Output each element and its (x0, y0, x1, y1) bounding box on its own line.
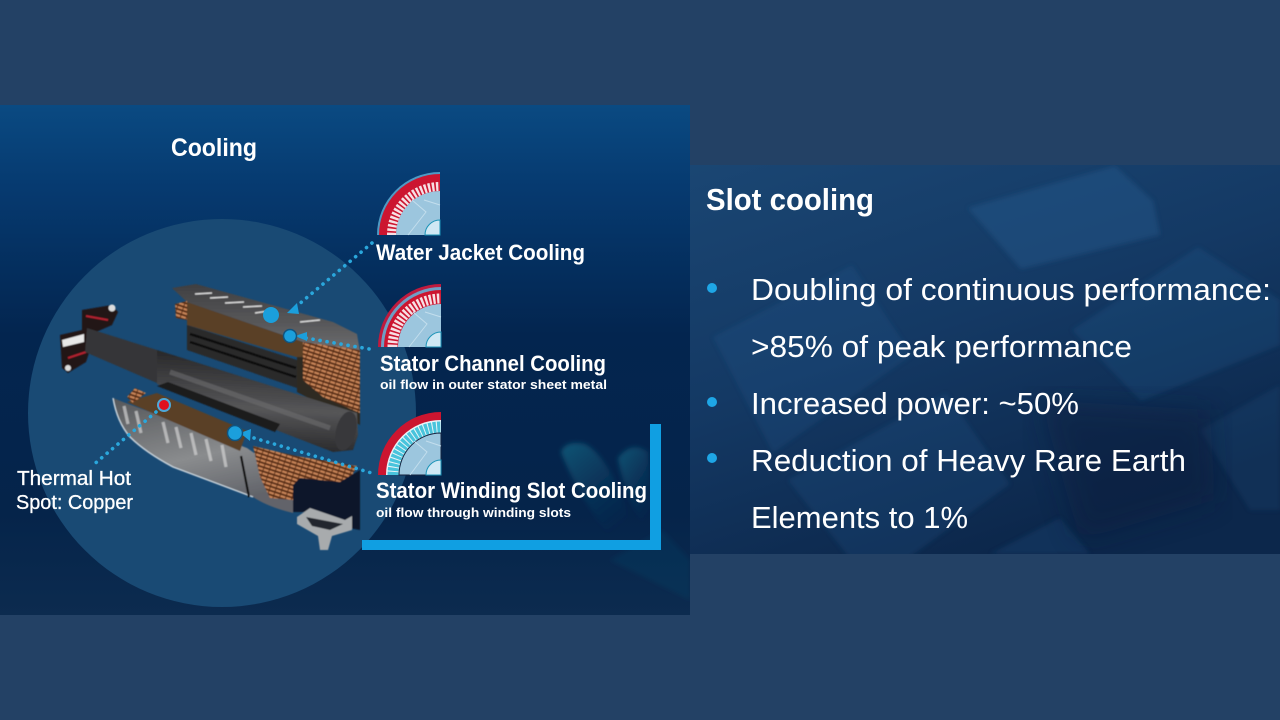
bullet: heavy rare earth reduction: Reduction of Heavy Rare Earth (751, 443, 1186, 478)
callout: water jacket pointer (263, 243, 372, 323)
bullet: doubling of continuous performance: Doubling of continuous performance: (751, 272, 1271, 307)
label: thermal hot spot (16, 468, 133, 514)
label: stator channel cooling (380, 351, 607, 392)
bullet: heavy rare earth reduction: Elements to 1% (751, 500, 968, 535)
icon: winding slot cross-section (378, 412, 441, 475)
L-shaped highlight bracket (362, 424, 661, 550)
upper stator shell (172, 284, 360, 425)
bullet: heavy rare earth reduction (707, 443, 1186, 535)
panel: cooling diagram (0, 105, 690, 615)
infographic canvas (0, 105, 1280, 615)
central shaft (85, 328, 361, 453)
bullet: doubling of continuous performance (707, 272, 1271, 364)
background circle (28, 219, 416, 607)
callout: winding slot pointer (228, 426, 375, 474)
lower stator shell (113, 388, 357, 513)
heading: slot cooling: Slot cooling (706, 182, 874, 217)
heading: Cooling: Cooling (171, 134, 257, 162)
background cube pattern (713, 166, 1280, 585)
label: stator winding slot cooling: oil flow through winding slots (376, 505, 571, 520)
icon: stator channel cross-section (378, 284, 441, 347)
label: stator channel cooling: oil flow in outer stator sheet metal (380, 377, 607, 392)
callout: stator channel pointer (284, 330, 375, 350)
label: stator winding slot cooling: Stator Winding Slot Cooling (376, 478, 647, 503)
callout: thermal hot spot pointer (92, 399, 170, 466)
label: stator channel cooling: Stator Channel Cooling (380, 351, 606, 376)
background shadow (1050, 404, 1212, 511)
label: water jacket cooling: Water Jacket Cooling (376, 240, 585, 265)
bullet: increased power: Increased power: ~50% (751, 386, 1079, 421)
motor bracket (293, 470, 360, 550)
motor left end mount (60, 304, 118, 373)
label: thermal hot spot: Thermal Hot (17, 468, 131, 490)
icon: water jacket cross-section (377, 172, 440, 235)
label: stator winding slot cooling (376, 478, 647, 520)
label: thermal hot spot: Spot: Copper (16, 492, 133, 514)
bullet: doubling of continuous performance: >85% of peak performance (751, 329, 1132, 364)
panel: slot cooling summary (690, 165, 1280, 585)
motor cutaway illustration (60, 284, 361, 550)
decorative leaf shapes (560, 442, 649, 510)
